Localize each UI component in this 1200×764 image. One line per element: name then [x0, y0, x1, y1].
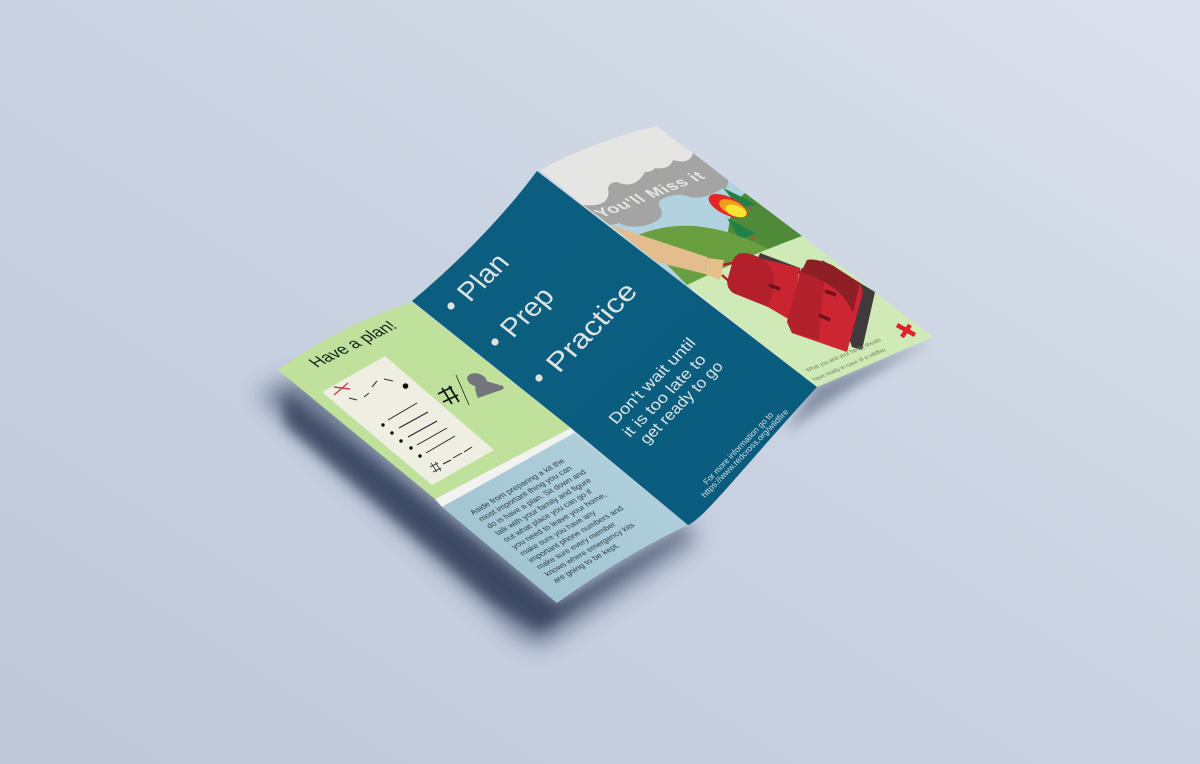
map and list card [322, 356, 494, 485]
icon: red X [334, 383, 350, 395]
slash [456, 375, 469, 405]
call to action: Don't wait until [606, 335, 700, 427]
body text: important phone numbers and [526, 504, 626, 564]
dashed route [349, 379, 393, 400]
far hill [728, 193, 802, 253]
clear sky [600, 180, 770, 290]
call to action [606, 335, 727, 447]
caption line 2: have ready in case of a wildfire [811, 347, 889, 382]
ground [687, 236, 933, 387]
hand [705, 258, 724, 280]
title: You'll Miss it: You'll Miss it [590, 169, 710, 220]
smoke cloud [583, 153, 728, 227]
body text [468, 457, 637, 585]
white stripe [435, 428, 575, 507]
route dot [403, 383, 408, 389]
body text: make sure you have any [518, 509, 599, 557]
bullet: Practice: Practice [540, 276, 643, 378]
panel: right wildfire illustration [540, 126, 933, 387]
arm [610, 225, 707, 274]
more information: For more information go to [701, 410, 776, 486]
panel: left green plan [278, 302, 688, 603]
icon: person silhouette [466, 371, 504, 398]
body text: out what place you can go if [501, 488, 595, 544]
pale blue text panel [442, 433, 688, 603]
icon: red cross [897, 325, 915, 337]
bullet dots [447, 302, 543, 382]
body text: do is have a plan. Sit down and [484, 468, 589, 530]
body text: Aside from preparing a kit the [468, 457, 567, 516]
panel: blue centre [412, 171, 817, 525]
body text: make sure every member [534, 521, 618, 571]
bullet: Prep: Prep [493, 281, 560, 343]
body text: talk with your family and figure [493, 477, 594, 537]
icon: trees and fire [705, 188, 756, 240]
near hill [638, 226, 770, 285]
call to action: get ready to go [637, 359, 727, 447]
checklist [381, 403, 472, 472]
body text: you need to leave your home, [509, 491, 609, 550]
heading: Have a plan: Have a plan! [304, 318, 401, 370]
caption: What you and your family should [804, 338, 883, 373]
call to action: it is too late to [620, 352, 710, 440]
icon: big hash [438, 386, 459, 404]
bullet: Plan: Plan [450, 248, 515, 307]
body text: are going to be kept. [551, 542, 622, 585]
backpack [722, 253, 875, 352]
more information: https://www.redcross.org/wildfire [699, 407, 791, 499]
body text: knows where emergency kits [542, 521, 637, 578]
paper shadow [258, 340, 930, 645]
body text: most important thing you can [476, 464, 575, 523]
paper sky [540, 126, 933, 387]
